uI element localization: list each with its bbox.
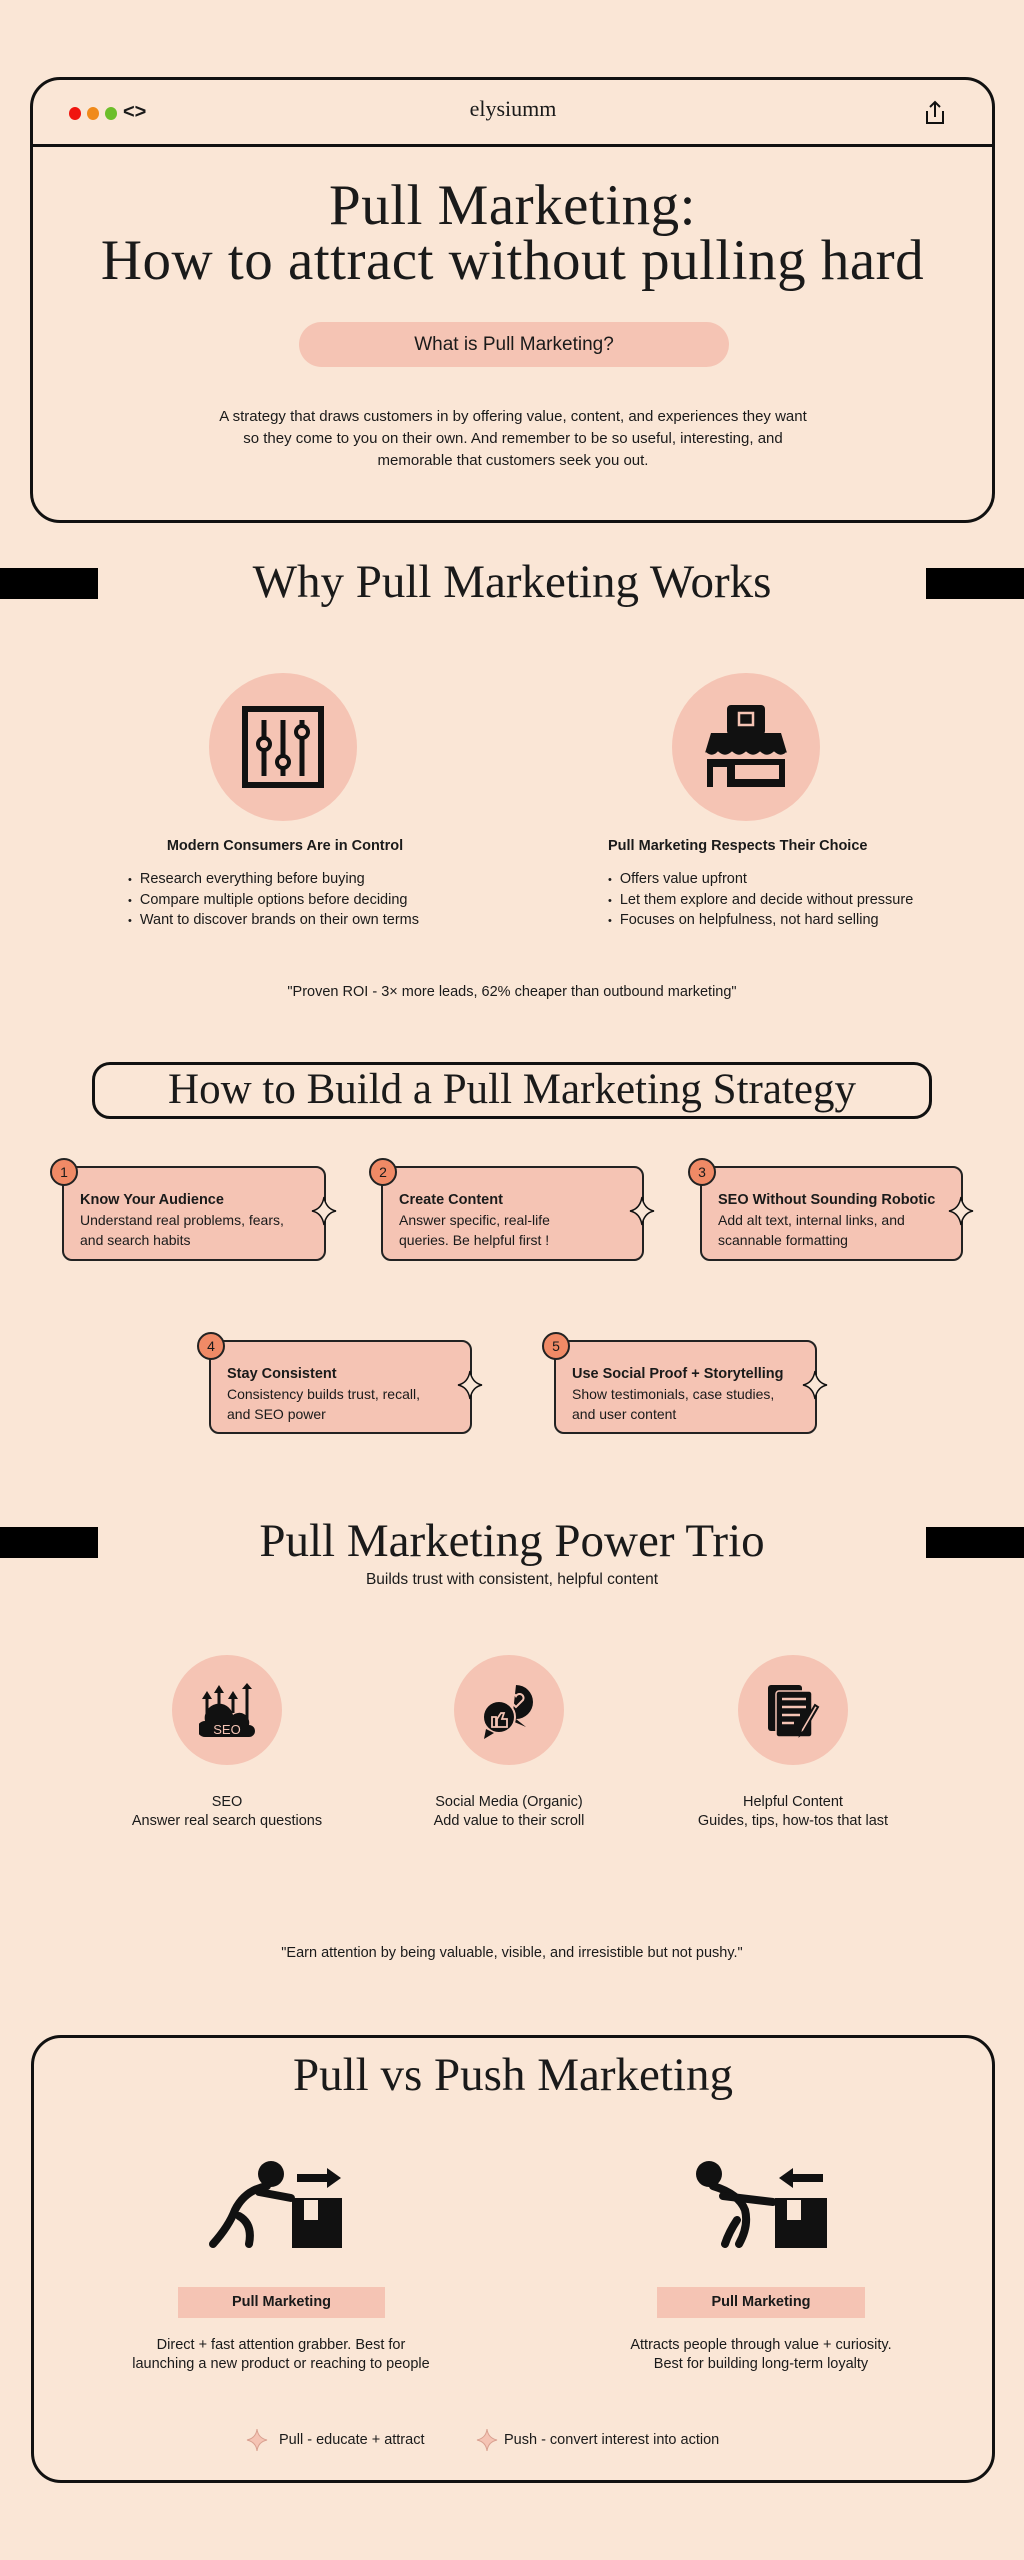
step 4: Stay Consistent [227,1366,337,1382]
subtitle: Builds trust with consistent, helpful content [366,1571,658,1588]
pill: what is pull marketing: What is Pull Marketing? [414,334,614,355]
quote: earn attention: "Earn attention by being valuable, visible, and irresistible but not pushy." [281,1945,743,1961]
step 4: Consistency builds trust, recall, [227,1386,420,1402]
text: Attracts people through value + curiosity. [630,2337,892,2353]
step 4: and SEO power [227,1406,326,1422]
text: launching a new product or reaching to people [132,2356,430,2372]
pill: what is pull marketing [299,322,729,367]
icon: shop [672,673,820,821]
label tape [657,2287,865,2318]
legend: Push - convert interest into action [504,2432,719,2448]
legend [246,2429,719,2451]
trio: helpful content [698,1655,888,1829]
bullet list: Offers value upfront [620,871,747,887]
label [132,1794,322,1829]
step 5: 5 [552,1338,560,1354]
icon: seo [172,1655,282,1765]
label: SEO [212,1794,242,1810]
bullet list: Compare multiple options before deciding [140,892,407,908]
step 2: Answer specific, real-life [399,1212,550,1228]
bullet list: Let them explore and decide without pressure [620,892,913,908]
bullet list: Want to discover brands on their own terms [140,912,419,928]
bullet list: Research everything before buying [140,871,365,887]
text: Direct + fast attention grabber. Best for [157,2337,405,2353]
step 3: Add alt text, internal links, and [718,1212,905,1228]
icon: sliders [209,673,357,821]
step 1: Understand real problems, fears, [80,1212,284,1228]
text [630,2337,892,2372]
step 3: SEO Without Sounding Robotic [718,1192,935,1208]
text: definition: so they come to you on their own. And remember to be so useful, interesting, and [243,430,783,447]
heading: Pull Marketing Respects Their Choice [608,838,867,854]
step 5: Show testimonials, case studies, [572,1386,774,1402]
label tape [178,2287,385,2318]
step 5: and user content [572,1406,676,1422]
icon: person pulling [696,2161,827,2248]
label [434,1794,584,1829]
label: Guides, tips, how-tos that last [698,1813,888,1829]
panel: pull vs push [31,2035,995,2483]
step 3: 3 [698,1164,706,1180]
step 2 [381,1166,644,1261]
heading: power trio: Pull Marketing Power Trio [259,1515,765,1567]
legend: Pull - educate + attract [279,2432,424,2448]
bullet list [608,871,913,928]
panel: respects choice [608,673,913,928]
step 4 [209,1340,472,1434]
step 2: queries. Be helpful first ! [399,1232,549,1248]
panel: header browser card [30,77,995,523]
title: Pull Marketing: [329,174,696,237]
heading: why pull marketing works: Why Pull Marketing Works [253,556,771,608]
step 1: Know Your Audience [80,1192,224,1208]
label: Answer real search questions [132,1813,322,1829]
text: Best for building long-term loyalty [654,2356,868,2372]
logo: elysiumm [470,96,556,121]
step 2: 2 [379,1164,387,1180]
heading: Modern Consumers Are in Control [167,838,403,854]
heading: Pull vs Push Marketing [293,2049,733,2101]
icon: window dots [69,101,146,123]
text: definition: A strategy that draws customers in by offering value, content, and experiences they want [219,408,807,425]
step 2: Create Content [399,1192,503,1208]
text: definition: memorable that customers seek you out. [378,452,648,469]
label tape: Pull Marketing [711,2294,811,2310]
quote: proven ROI: "Proven ROI - 3× more leads, 62% cheaper than outbound marketing" [287,984,737,1000]
title [101,174,924,292]
icon: window dots: <> [123,101,146,123]
bullet list [128,871,419,928]
icon: notes [738,1655,848,1765]
label: Add value to their scroll [434,1813,584,1829]
step 5: Use Social Proof + Storytelling [572,1366,784,1382]
label: Helpful Content [743,1794,843,1810]
panel: modern consumers [128,673,419,928]
step 4: 4 [207,1338,215,1354]
icon: social bubbles [454,1655,564,1765]
trio: SEO [132,1655,322,1829]
title: How to attract without pulling hard [101,229,924,292]
label tape: Pull Marketing [232,2294,331,2310]
step 3 [700,1166,963,1261]
step 1 [62,1166,326,1261]
text: definition [219,408,807,469]
text [132,2337,430,2372]
label [698,1794,888,1829]
label: Social Media (Organic) [435,1794,583,1810]
icon: share [926,100,944,124]
icon: seo: SEO [213,1722,241,1737]
step 1: and search habits [80,1232,191,1248]
bullet list: Focuses on helpfulness, not hard selling [620,912,879,928]
step 3: scannable formatting [718,1232,848,1248]
icon: person pushing [209,2161,342,2248]
step 1: 1 [60,1164,68,1180]
step 5 [554,1340,817,1434]
heading box: how to build [92,1062,932,1119]
trio: social [434,1655,584,1829]
heading box: how to build: How to Build a Pull Marketing Strategy [168,1066,856,1113]
